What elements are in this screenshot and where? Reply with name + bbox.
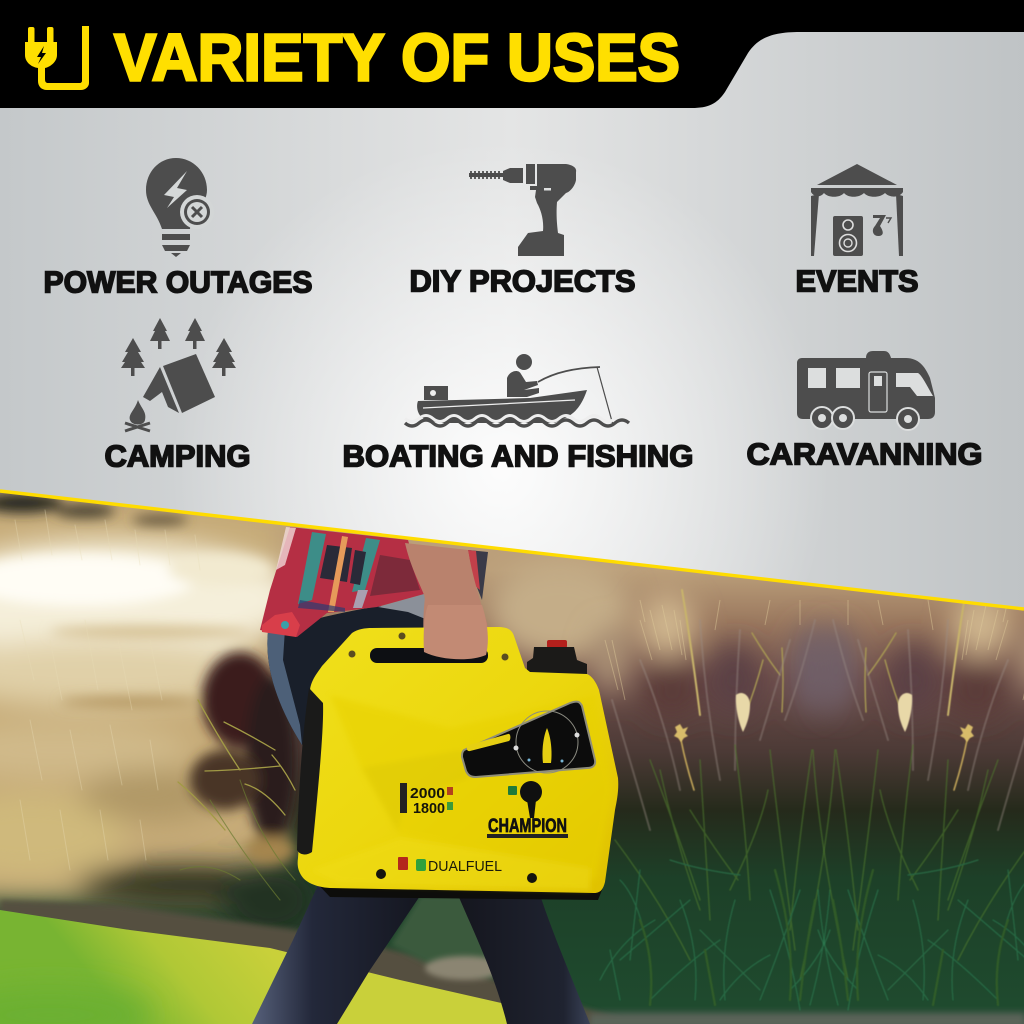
yellow diagonal divider: [0, 491, 1024, 609]
grass between legs: [390, 898, 486, 964]
generator black grip: [297, 688, 323, 854]
label: DIY PROJECTS: [410, 264, 636, 298]
generator body shading: [334, 698, 593, 894]
wattage label: 1800: [413, 800, 445, 817]
icon: fisherman in boat: [405, 354, 629, 426]
use: DIY projects: [410, 164, 636, 298]
label: CARAVANNING: [746, 436, 982, 472]
person: torso jeans: [267, 594, 440, 745]
handle slot: [370, 648, 488, 663]
generator body: [298, 627, 618, 893]
icon: light bulb: [146, 158, 214, 257]
use: power outages: [44, 158, 312, 300]
icon: canopy with speaker: [811, 164, 903, 256]
icon: motorhome: [797, 351, 935, 430]
Champion logo: CHAMPION: [488, 816, 567, 837]
icon: plug and cable: [25, 26, 89, 90]
use: boating and fishing: [342, 354, 694, 474]
use: events: [796, 164, 918, 298]
Dual Fuel logo: [398, 857, 502, 871]
header banner: [0, 0, 1024, 108]
mirrored grass clump: [592, 590, 835, 1010]
person: plaid shirt: [260, 527, 488, 637]
label: POWER OUTAGES: [44, 264, 312, 300]
wattage label: 2000: [410, 785, 445, 802]
ground gravel right: [590, 1014, 1024, 1024]
wattage label: [400, 783, 453, 813]
outlet: [508, 781, 542, 818]
bright tan grass behind the man: [490, 560, 630, 660]
use: camping: [104, 318, 250, 474]
sunlit grass on the left: [0, 493, 320, 940]
panel glow: [0, 0, 1024, 608]
title: VARIETY OF USES: [114, 20, 680, 96]
generator shadow base: [320, 886, 603, 900]
control panel: [462, 702, 595, 777]
Dual Fuel logo: DUALFUEL: [428, 858, 502, 875]
icon: drill: [469, 164, 576, 256]
grey panel: [0, 0, 1024, 608]
label: BOATING AND FISHING: [342, 438, 694, 474]
label: EVENTS: [796, 264, 918, 298]
lawn: [0, 910, 520, 1024]
screws: [348, 632, 537, 883]
icon: tent, trees and campfire: [121, 318, 236, 431]
photo background: ornamental grass: [0, 490, 1024, 1024]
photo: man carrying generator through tall grass: [0, 490, 1024, 1024]
dirt path: [0, 900, 620, 1024]
generator: [297, 605, 618, 900]
label: CAMPING: [104, 438, 250, 474]
person: arm and hand: [405, 543, 488, 628]
fingers on handle: [424, 605, 488, 659]
generator red cap: [527, 640, 587, 674]
use: caravanning: [746, 351, 982, 472]
person: legs in jeans: [252, 885, 590, 1024]
